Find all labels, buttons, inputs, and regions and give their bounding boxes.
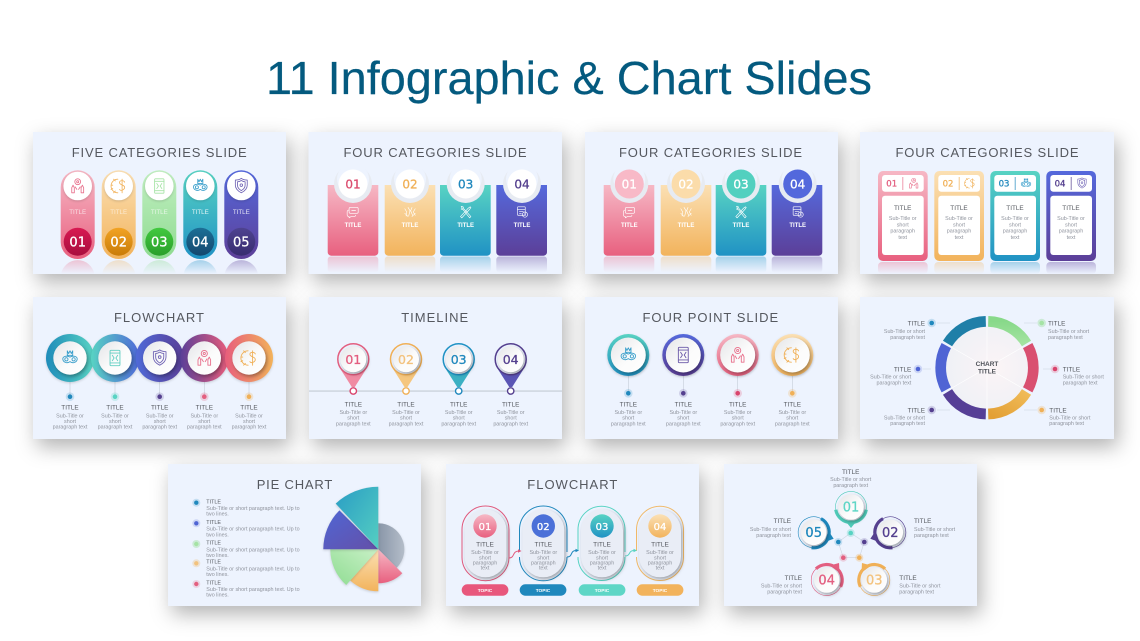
captions: paragraph text <box>232 425 267 431</box>
bar 03 <box>440 163 491 256</box>
bar 02: TITLE <box>402 223 418 229</box>
bar 03 <box>716 163 766 256</box>
pin 04 <box>495 344 526 394</box>
pill 03: TITLE <box>151 209 168 216</box>
labels: TITLE <box>842 469 859 476</box>
captions: paragraph text <box>720 421 756 427</box>
capsule 04 <box>639 509 681 577</box>
bar 01 <box>604 163 654 256</box>
pin 03 <box>443 344 474 394</box>
ring 05 <box>225 334 273 382</box>
labels: Sub-Title or short <box>1048 329 1090 335</box>
labels <box>870 320 1104 427</box>
pill 05 <box>224 170 258 259</box>
ring 04 <box>771 334 813 376</box>
card 04: paragraph <box>1059 229 1083 235</box>
donut segments <box>941 321 1033 414</box>
bar 02: TITLE <box>678 223 694 229</box>
capsule outlines <box>462 506 684 581</box>
captions: paragraph text <box>441 421 477 427</box>
captions: TITLE <box>240 404 258 412</box>
card 02: 02 <box>943 179 953 189</box>
heading: flowchart: FLOWCHART <box>527 477 617 492</box>
dots <box>66 392 253 401</box>
card 04: TITLE <box>1062 205 1080 212</box>
ring 02 <box>91 334 139 382</box>
captions: short <box>786 416 799 422</box>
pie slices <box>323 487 404 591</box>
labels: TITLE <box>894 366 911 374</box>
panel: flowchart with capsules <box>446 464 699 606</box>
captions: TITLE <box>151 404 168 412</box>
legend <box>192 499 300 599</box>
captions: Sub-Title or <box>614 410 642 416</box>
topic pills: TOPIC <box>536 588 551 594</box>
pin 02 <box>390 344 422 394</box>
legend: TITLE <box>206 580 221 586</box>
bar 01 <box>328 163 378 256</box>
bar 04: 04 <box>790 177 805 191</box>
step 03: 03 <box>866 574 883 589</box>
pill 01 <box>61 170 95 259</box>
panel: pie chart <box>168 464 421 606</box>
heading: pie chart: PIE CHART <box>257 477 332 492</box>
step 04: 04 <box>818 574 835 589</box>
labels: Sub-Title or short <box>1063 375 1104 381</box>
labels: paragraph text <box>1048 335 1083 341</box>
legend: two lines. <box>206 532 229 538</box>
step 03 <box>849 554 896 602</box>
capsule 02: 02 <box>537 522 550 533</box>
captions: Sub-Title or <box>445 410 473 416</box>
labels: TITLE <box>908 320 925 328</box>
capsule 01 <box>464 509 506 577</box>
captions <box>53 404 267 431</box>
card 01: short <box>897 222 909 228</box>
pentagon connector <box>838 533 864 558</box>
captions: short <box>732 416 744 422</box>
captions: Sub-Title or <box>190 413 218 419</box>
labels: TITLE <box>899 575 917 582</box>
capsule 01: paragraph <box>473 560 497 566</box>
panel: five step radial <box>724 464 977 606</box>
capsule 03: short <box>596 555 608 561</box>
captions: Sub-Title or <box>392 410 420 416</box>
captions: short <box>109 419 121 425</box>
card 04: text <box>1067 235 1076 241</box>
legend: Sub-Title or short paragraph text. Up to <box>206 506 300 512</box>
captions: TITLE <box>675 402 692 408</box>
labels: TITLE <box>1063 366 1080 374</box>
labels: Sub-Title or short <box>914 527 956 533</box>
card 01 <box>878 171 928 261</box>
bar 04: 04 <box>514 177 530 191</box>
capsule 03: text <box>598 566 607 572</box>
ring 01 <box>46 334 94 382</box>
centre dots <box>834 529 868 562</box>
captions: TITLE <box>620 402 637 408</box>
bar 03: TITLE <box>733 223 749 229</box>
pill 02: TITLE <box>110 209 127 216</box>
capsule 01: text <box>481 566 490 572</box>
labels: TITLE <box>908 408 925 414</box>
heading: timeline: TIMELINE <box>401 310 469 325</box>
captions: paragraph text <box>389 421 424 427</box>
captions: TITLE <box>502 402 519 408</box>
legend: TITLE <box>206 500 221 506</box>
legend: TITLE <box>206 560 221 566</box>
labels: paragraph text <box>767 589 802 595</box>
legend: two lines. <box>206 512 229 518</box>
captions: TITLE <box>729 402 746 408</box>
captions: paragraph text <box>775 421 810 427</box>
card 03: Sub-Title or <box>1001 216 1029 222</box>
card 03: paragraph <box>1003 229 1027 235</box>
bar 03: TITLE <box>457 223 474 229</box>
capsule 02 <box>522 509 564 577</box>
connector lines <box>628 376 792 393</box>
labels: TITLE <box>1049 408 1067 414</box>
panel: four categories slide, white numbers <box>308 132 562 274</box>
topic pills <box>462 584 683 596</box>
labels: TITLE <box>774 518 791 525</box>
captions: Sub-Title or <box>235 413 263 419</box>
legend: Sub-Title or short paragraph text. Up to <box>206 587 300 593</box>
chart title <box>976 361 998 376</box>
bar 04: TITLE <box>789 223 806 229</box>
capsule 03 <box>581 509 623 577</box>
labels: Sub-Title or short <box>899 583 941 589</box>
ring 03 <box>136 334 184 382</box>
panel: timeline <box>309 297 562 439</box>
captions: short <box>505 416 517 422</box>
bar 01: 01 <box>622 177 637 191</box>
pill 01: TITLE <box>69 209 86 216</box>
capsule 04: 04 <box>654 522 666 533</box>
captions: short <box>198 419 211 425</box>
pill 05: 05 <box>233 235 250 250</box>
card 01: paragraph <box>890 229 915 235</box>
legend: TITLE <box>206 520 221 526</box>
reflections of bars <box>604 256 822 272</box>
arrows <box>509 549 637 558</box>
captions: paragraph text <box>53 425 88 431</box>
step 04 <box>805 554 852 602</box>
captions: short <box>154 419 166 425</box>
heading: flowchart: FLOWCHART <box>114 310 204 325</box>
reflections of pills <box>61 260 258 274</box>
ring 03 <box>717 334 759 376</box>
labels: paragraph text <box>890 335 925 341</box>
heading: four categories: FOUR CATEGORIES SLIDE <box>344 145 527 160</box>
captions: TITLE <box>784 402 801 408</box>
bar 04: TITLE <box>514 223 530 229</box>
captions: Sub-Title or <box>669 410 697 416</box>
card 01: text <box>898 235 908 241</box>
legend: Sub-Title or short paragraph text. Up to <box>206 566 300 572</box>
leader lines <box>923 323 1051 410</box>
labels: Sub-Title or short <box>870 375 912 381</box>
topic pills: TOPIC <box>653 588 668 594</box>
labels: TITLE <box>1048 320 1065 328</box>
bar 01: 01 <box>345 177 361 191</box>
legend: two lines. <box>206 553 229 559</box>
card 01: TITLE <box>894 205 911 212</box>
captions: short <box>243 419 255 425</box>
panel: four categories slide, cards <box>860 132 1114 274</box>
captions: Sub-Title or <box>724 410 752 416</box>
capsule 03: paragraph <box>590 560 614 566</box>
pill 04 <box>183 170 217 259</box>
captions: Sub-Title or <box>497 410 525 416</box>
panel: donut chart <box>860 297 1114 439</box>
topic pills: TOPIC <box>478 588 493 594</box>
captions <box>611 402 810 427</box>
card 02: text <box>955 235 964 241</box>
captions: short <box>400 416 412 422</box>
card 04: Sub-Title or <box>1057 216 1085 222</box>
capsule 03: 03 <box>596 522 608 533</box>
pin 02: 02 <box>398 352 414 367</box>
step 05: 05 <box>805 526 822 541</box>
topic pills: TOPIC <box>595 588 610 594</box>
card 02: paragraph <box>947 229 971 235</box>
labels: paragraph text <box>1049 421 1085 427</box>
captions: paragraph text <box>336 421 371 427</box>
capsule 01: TITLE <box>476 542 495 548</box>
captions: TITLE <box>196 404 213 412</box>
captions: TITLE <box>450 402 467 408</box>
captions: Sub-Title or <box>778 410 806 416</box>
legend: two lines. <box>206 593 229 599</box>
capsule 01: short <box>479 555 491 561</box>
pin 01 <box>338 344 369 394</box>
panel: flowchart with rings <box>33 297 286 439</box>
step 05 <box>794 513 838 554</box>
bar 03: 03 <box>458 177 473 191</box>
title: 11 Infographic & Chart Slides <box>266 52 872 104</box>
capsule 04: Sub-Title or <box>646 550 674 556</box>
heading: four point: FOUR POINT SLIDE <box>642 310 778 325</box>
card 03: 03 <box>999 179 1009 189</box>
pill 02 <box>102 170 136 259</box>
bar 01: TITLE <box>345 223 361 229</box>
card 03: short <box>1009 222 1021 228</box>
captions: TITLE <box>106 404 124 412</box>
labels: Sub-Title or short <box>1049 415 1091 421</box>
panel: five categories slide <box>33 132 286 274</box>
labels: paragraph text <box>833 483 869 489</box>
labels: TITLE <box>914 518 931 525</box>
capsule 02: text <box>539 566 548 572</box>
labels: paragraph text <box>890 421 925 427</box>
timeline axis <box>309 390 562 392</box>
bar 03: 03 <box>733 177 749 191</box>
step 01 <box>836 491 866 528</box>
capsule 01: Sub-Title or <box>471 550 499 556</box>
captions: TITLE <box>61 404 79 412</box>
legend: Sub-Title or short paragraph text. Up to <box>206 527 300 533</box>
capsule 04: TITLE <box>651 542 670 548</box>
capsule 04: paragraph <box>648 560 672 566</box>
pill 04: 04 <box>192 235 209 250</box>
bar 02: 02 <box>678 177 694 191</box>
labels: paragraph text <box>914 533 949 539</box>
labels <box>750 469 956 595</box>
card 03: text <box>1011 235 1020 241</box>
ring 04 <box>180 334 228 382</box>
capsule 04: short <box>654 555 666 561</box>
captions: short <box>64 419 76 425</box>
bar 01: TITLE <box>621 223 638 229</box>
heading: four categories: FOUR CATEGORIES SLIDE <box>619 145 802 160</box>
connector lines <box>70 380 249 396</box>
pin 04: 04 <box>503 352 519 367</box>
pill 03: 03 <box>151 235 168 250</box>
step 02 <box>866 513 910 554</box>
card 01: 01 <box>886 179 897 189</box>
dots <box>624 389 797 398</box>
chart title: CHART <box>976 361 998 368</box>
legend: two lines. <box>206 572 229 578</box>
captions: TITLE <box>345 402 362 408</box>
pill 01: 01 <box>69 235 86 250</box>
captions: paragraph text <box>493 421 529 427</box>
step 02: 02 <box>882 526 899 541</box>
card 04 <box>1046 171 1096 261</box>
step 01: 01 <box>843 501 859 516</box>
dots <box>914 319 1059 414</box>
captions: Sub-Title or <box>56 413 84 419</box>
captions <box>336 402 529 427</box>
pill 04: TITLE <box>192 209 209 216</box>
labels: Sub-Title or short <box>750 527 791 533</box>
capsule 03: TITLE <box>593 542 612 548</box>
card 04: 04 <box>1055 179 1065 189</box>
captions: paragraph text <box>98 425 133 431</box>
ring 02 <box>662 334 704 376</box>
captions: paragraph text <box>666 421 701 427</box>
labels: Sub-Title or short <box>761 583 802 589</box>
bar 04 <box>772 163 822 256</box>
captions: Sub-Title or <box>101 413 129 419</box>
card 03: TITLE <box>1006 205 1024 212</box>
card 04: short <box>1065 222 1077 228</box>
legend: Sub-Title or short paragraph text. Up to <box>206 547 300 553</box>
captions: TITLE <box>397 402 415 408</box>
labels: paragraph text <box>756 533 791 539</box>
panel: four point slide <box>585 297 838 439</box>
chart title: TITLE <box>978 369 997 376</box>
captions: paragraph text <box>187 425 222 431</box>
heading: five categories: FIVE CATEGORIES SLIDE <box>72 145 247 160</box>
captions: paragraph text <box>142 425 178 431</box>
card 02 <box>934 171 984 261</box>
labels: Sub-Title or short <box>830 477 872 483</box>
capsule 01: 01 <box>479 522 491 533</box>
bar 02 <box>385 163 435 256</box>
bar 02: 02 <box>402 177 418 191</box>
captions: Sub-Title or <box>146 413 174 419</box>
card 02: Sub-Title or <box>945 216 973 222</box>
captions: short <box>347 416 360 422</box>
card 02: TITLE <box>950 205 968 212</box>
pill 02: 02 <box>110 235 127 250</box>
heading: four categories: FOUR CATEGORIES SLIDE <box>896 145 1079 160</box>
pin 01: 01 <box>345 352 361 367</box>
capsule 02: Sub-Title or <box>529 550 557 556</box>
reflections of cards <box>878 262 1096 274</box>
pill 05: TITLE <box>233 209 250 216</box>
capsule 02: paragraph <box>531 560 556 566</box>
labels: Sub-Title or short <box>884 329 925 335</box>
captions: short <box>453 416 465 422</box>
captions: Sub-Title or <box>339 410 367 416</box>
labels: paragraph text <box>877 381 912 387</box>
pill 03 <box>142 170 176 259</box>
bar 04 <box>496 163 547 256</box>
capsule 04: text <box>656 566 665 572</box>
card 03 <box>990 171 1040 261</box>
captions: short <box>677 416 690 422</box>
captions: short <box>622 416 635 422</box>
card 01: Sub-Title or <box>889 216 917 222</box>
bar 02 <box>661 163 711 256</box>
labels: TITLE <box>785 575 802 582</box>
labels: Sub-Title or short <box>884 415 925 421</box>
capsule 02: short <box>537 555 550 561</box>
captions: paragraph text <box>611 421 646 427</box>
labels: paragraph text <box>899 589 935 595</box>
labels: paragraph text <box>1063 381 1098 387</box>
donut inner disc <box>946 327 1028 409</box>
capsule 03: Sub-Title or <box>588 550 616 556</box>
capsule 02: TITLE <box>534 542 553 548</box>
pin 03: 03 <box>451 352 467 367</box>
reflections of bars <box>328 256 547 272</box>
panel: four categories slide, coloured numbers <box>585 132 838 274</box>
legend: TITLE <box>206 541 221 547</box>
card 02: short <box>953 222 965 228</box>
ring 01 <box>607 334 649 376</box>
